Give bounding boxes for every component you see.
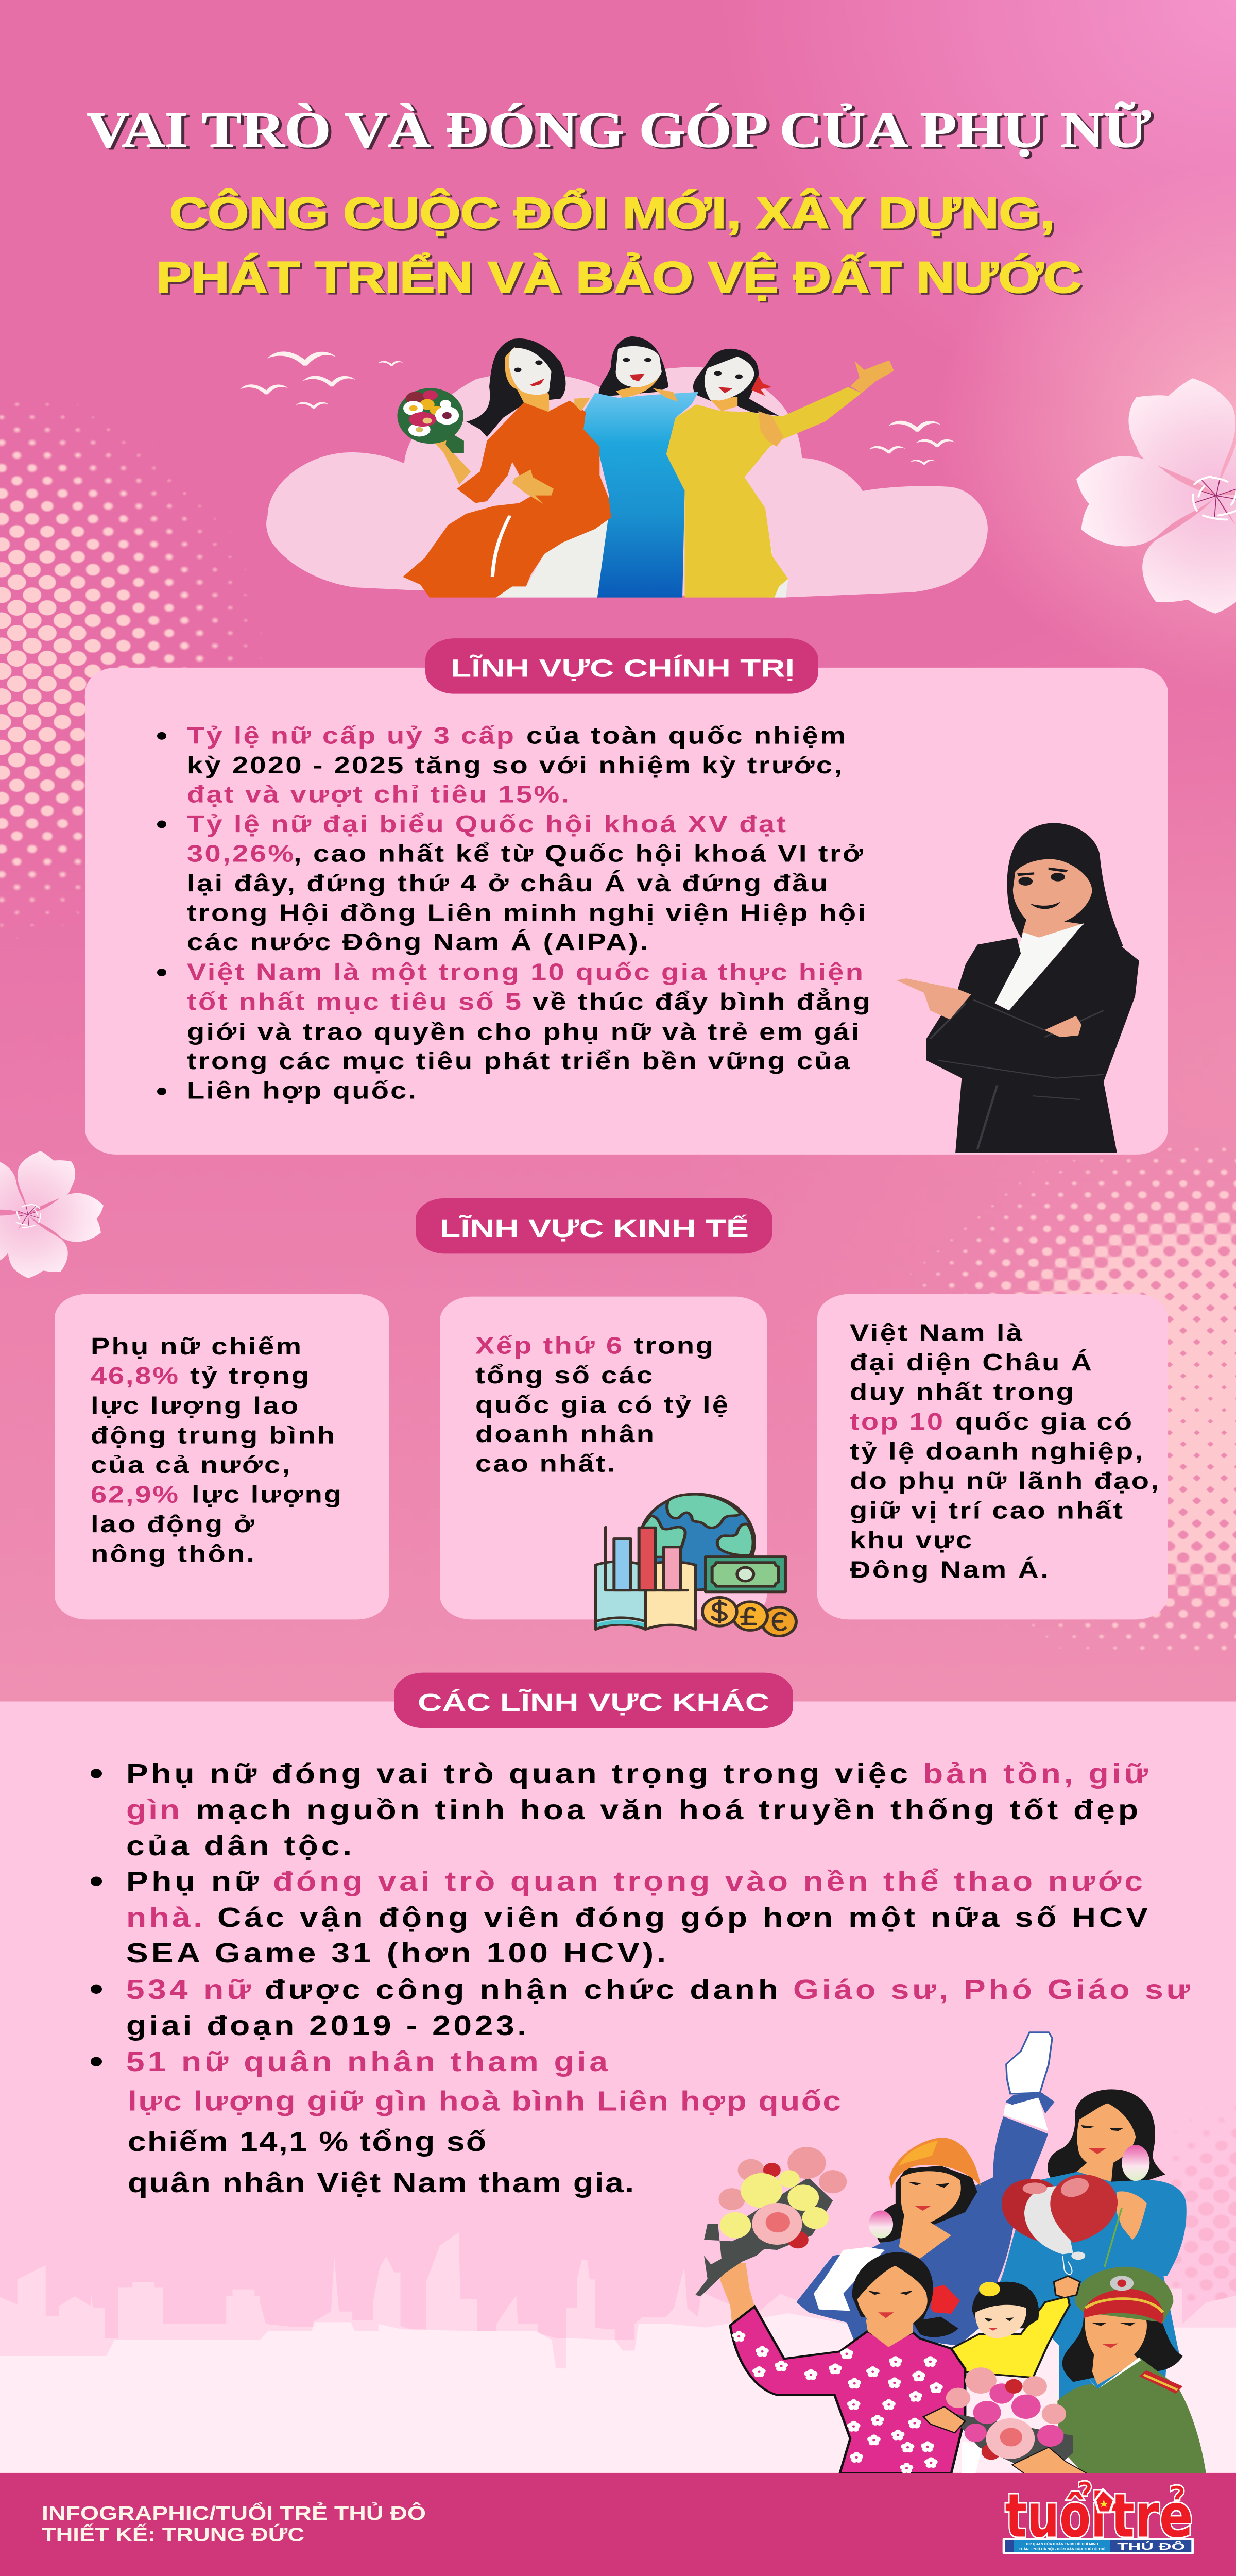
- bullet list: other fields: chiếm 14,1 % tổng số: [128, 2127, 486, 2157]
- bullet list: other fields: Phụ nữ: [126, 1867, 259, 1897]
- subtitle: CÔNG CUỘC ĐỔI MỚI, XÂY DỰNG,: [169, 188, 1055, 238]
- child with yellow jacket: [951, 2276, 1080, 2378]
- panel: economy card 3: Đông Nam Á.: [850, 1556, 1049, 1583]
- bullet list: other fields: bản tồn, giữ: [923, 1759, 1148, 1789]
- illustration: group of women: [695, 2032, 1206, 2473]
- heading pill: CÁC LĨNH VỰC KHÁC: CÁC LĨNH VỰC KHÁC: [418, 1688, 769, 1717]
- bullet list: other fields: của dân tộc.: [126, 1831, 352, 1861]
- background: [0, 0, 1236, 1704]
- bullet list: other fields: SEA Game 31 (hơn 100 HCV).: [126, 1938, 666, 1969]
- panel: economy card 1: 62,9%: [91, 1481, 178, 1508]
- panel: economy card 3: tỷ lệ doanh nghiệp,: [850, 1437, 1143, 1464]
- panel: economy card 3: Việt Nam là: [850, 1319, 1022, 1346]
- heading pill: LĨNH VỰC CHÍNH TRỊ: [425, 638, 818, 694]
- woman hair backs: [466, 336, 779, 437]
- woman with helmet and raised arm: [796, 2032, 1055, 2346]
- halftone dots right: [909, 1147, 1236, 1657]
- faces and hands: [430, 346, 894, 504]
- panel: economy card 2: quốc gia có tỷ lệ: [475, 1391, 728, 1418]
- panel: economy card 1: nông thôn.: [91, 1540, 254, 1567]
- bullet list: other fields: gìn: [126, 1795, 180, 1825]
- bullet list: politics: Liên hợp quốc.: [187, 1077, 416, 1104]
- cloud: [266, 367, 988, 598]
- bullet list: politics: lại đây, đứng thứ 4 ở châu Á và đứng đầu: [187, 869, 828, 896]
- bullet list: other fields: quân nhân Việt Nam tham gia.: [128, 2168, 634, 2198]
- bullet list: other fields: lực lượng giữ gìn hoà bình Liên hợp quốc: [128, 2087, 841, 2116]
- title: VAI TRÒ VÀ ĐÓNG GÓP CỦA PHỤ NỮ: [87, 102, 1151, 158]
- bullet list: politics: giới và trao quyền cho phụ nữ và trẻ em gái: [187, 1018, 859, 1045]
- orange ao dai: [403, 401, 611, 598]
- illustration: businesswoman: [896, 823, 1139, 1153]
- bullet list: other fields: giai đoạn 2019 - 2023.: [126, 2011, 526, 2041]
- heading pill: CÁC LĨNH VỰC KHÁC: [394, 1673, 793, 1728]
- logo: Tuổi Trẻ Thủ Đô: THỦ ĐÔ: [1117, 2541, 1185, 2552]
- bullet list: other fields: 51 nữ quân nhân tham gia: [126, 2047, 608, 2077]
- panel: economy card 2: doanh nhân: [475, 1420, 654, 1447]
- heading pill: LĨNH VỰC CHÍNH TRỊ: LĨNH VỰC CHÍNH TRỊ: [451, 654, 795, 682]
- bullet list: politics: , cao nhất kể từ Quốc hội khoá VI trở: [294, 840, 863, 867]
- panel: economy card 1: [55, 1294, 389, 1619]
- logo: Tuổi Trẻ Thủ Đô: THÀNH PHỐ HÀ NỘI - DIỄN ĐÀN CỦA THẾ HỆ TRẺ: [1019, 2546, 1106, 2551]
- bullet list: politics: đạt và vượt chỉ tiêu 15%.: [187, 781, 569, 807]
- footer credits: INFOGRAPHIC/TUỔI TRẺ THỦ ĐÔ: [42, 2501, 426, 2524]
- bouquet of roses lower: [923, 2367, 1087, 2473]
- bullet list: other fields: đóng vai trò quan trọng vào nền thể thao nước: [273, 1867, 1143, 1897]
- panel: economy card 2: [440, 1297, 767, 1619]
- woman in turquoise jacket: [1000, 2089, 1187, 2401]
- panel: economy card 3: [817, 1294, 1168, 1619]
- subtitle: [156, 188, 1082, 302]
- icon: small cherry blossom left: [0, 1150, 104, 1278]
- panel: economy card 1: lực lượng: [192, 1481, 341, 1508]
- bullet list: other fields: mạch nguồn tinh hoa văn hoá truyền thống tốt đẹp: [196, 1795, 1138, 1825]
- panel: economy card 1: động trung bình: [91, 1421, 335, 1449]
- panel: economy card 1: lao động ở: [91, 1511, 254, 1537]
- panel: economy card 3: quốc gia có: [955, 1408, 1132, 1435]
- bullet list: politics: các nước Đông Nam Á (AIPA).: [187, 928, 648, 955]
- police woman: [1057, 2267, 1206, 2473]
- bullet list: politics: 30,26%: [187, 840, 294, 867]
- bouquet: [397, 388, 464, 453]
- hero illustration: three women and cloud: [240, 336, 988, 598]
- bullet list: other fields: 534 nữ: [126, 1975, 251, 2005]
- panel: economy card 1: tỷ trọng: [190, 1362, 309, 1389]
- bird flock left: [240, 351, 403, 409]
- panel: lower section background: [0, 1701, 1236, 2474]
- icon: globe, chart, money: [596, 1494, 796, 1636]
- heading pill: LĨNH VỰC KINH TẾ: LĨNH VỰC KINH TẾ: [440, 1214, 749, 1243]
- panel: economy card 3: giữ vị trí cao nhất: [850, 1497, 1123, 1523]
- footer credits: THIẾT KẾ: TRUNG ĐỨC: [42, 2523, 304, 2546]
- balloons: [1002, 2175, 1118, 2275]
- panel: economy card 1: Phụ nữ chiếm: [91, 1333, 301, 1360]
- bullet list: politics: Tỷ lệ nữ đại biểu Quốc hội khoá XV đạt: [187, 810, 786, 837]
- woman in pink ao dai with bouquet: [719, 2252, 983, 2473]
- panel: economy card 1: lực lượng lao: [91, 1392, 298, 1419]
- logo: Tuổi Trẻ Thủ Đô: CƠ QUAN CỦA ĐOÀN TNCS HỒ CHÍ MINH: [1026, 2541, 1098, 2546]
- footer credits: [42, 2501, 426, 2546]
- bullet list: politics: về thúc đẩy bình đẳng: [533, 988, 870, 1015]
- panel: economy card 2: trong: [634, 1332, 713, 1359]
- bullet list: politics: Việt Nam là một trong 10 quốc gia thực hiện: [187, 958, 863, 985]
- footer band: [0, 2473, 1236, 2576]
- bullet list: other fields: Phụ nữ đóng vai trò quan trọng trong việc: [126, 1759, 908, 1789]
- bullet list: politics: trong Hội đồng Liên minh nghị viện Hiệp hội: [187, 899, 866, 926]
- bullet list: other fields: [91, 1759, 1190, 2198]
- panel: economy card 3: đại diện Châu Á: [850, 1348, 1092, 1376]
- bullet list: politics: trong các mục tiêu phát triển bền vững của: [187, 1047, 850, 1074]
- panel: economy card 3: do phụ nữ lãnh đạo,: [850, 1467, 1159, 1494]
- blue ao dai: [583, 392, 698, 598]
- bullet list: politics: kỳ 2020 - 2025 tăng so với nhiệm kỳ trước,: [187, 751, 842, 778]
- bouquet of roses upper: [695, 2147, 847, 2296]
- bullet list: other fields: được công nhận chức danh: [265, 1975, 778, 2005]
- halftone dots left: [0, 402, 262, 939]
- faint halftone dots lower right: [1161, 2119, 1236, 2301]
- panel: economy card 1: 46,8%: [91, 1362, 178, 1389]
- panel: economy card 2: tổng số các: [475, 1361, 653, 1388]
- panel: economy card 1: của cả nước,: [91, 1451, 290, 1478]
- bullet list: other fields: Giáo sư, Phó Giáo sư: [793, 1975, 1190, 2005]
- logo: Tuổi Trẻ Thủ Đô: trẻ: [1111, 2481, 1193, 2551]
- panel: economy card 3: duy nhất trong: [850, 1378, 1074, 1405]
- logo: Tuổi Trẻ Thủ Đô: tuổi: [1005, 2481, 1106, 2551]
- bullet list: politics: [157, 722, 870, 1104]
- panel: economy card 2: Xếp thứ 6: [475, 1332, 622, 1359]
- heading pill: LĨNH VỰC KINH TẾ: [416, 1198, 772, 1253]
- subtitle: PHÁT TRIỂN VÀ BẢO VỆ ĐẤT NƯỚC: [156, 252, 1082, 302]
- bullet list: politics: của toàn quốc nhiệm: [526, 722, 846, 749]
- panel: economy card 2: cao nhất.: [475, 1450, 615, 1477]
- icon: large cherry blossom right: [1076, 376, 1236, 614]
- white trousers: [494, 510, 788, 598]
- bullet list: politics: tốt nhất mục tiêu số 5: [187, 988, 521, 1015]
- skyline: [0, 2232, 1236, 2473]
- panel: politics: [85, 638, 1168, 1155]
- bird flock right: [869, 421, 955, 465]
- panel: economy card 3: top 10: [850, 1408, 943, 1435]
- bullet list: other fields: nhà.: [126, 1903, 202, 1933]
- yellow ao dai: [666, 387, 862, 598]
- bullet list: politics: Tỷ lệ nữ cấp uỷ 3 cấp: [187, 722, 514, 749]
- bullet list: other fields: Các vận động viên đóng góp hơn một nữa số HCV: [217, 1903, 1148, 1933]
- panel: economy card 3: khu vực: [850, 1526, 972, 1553]
